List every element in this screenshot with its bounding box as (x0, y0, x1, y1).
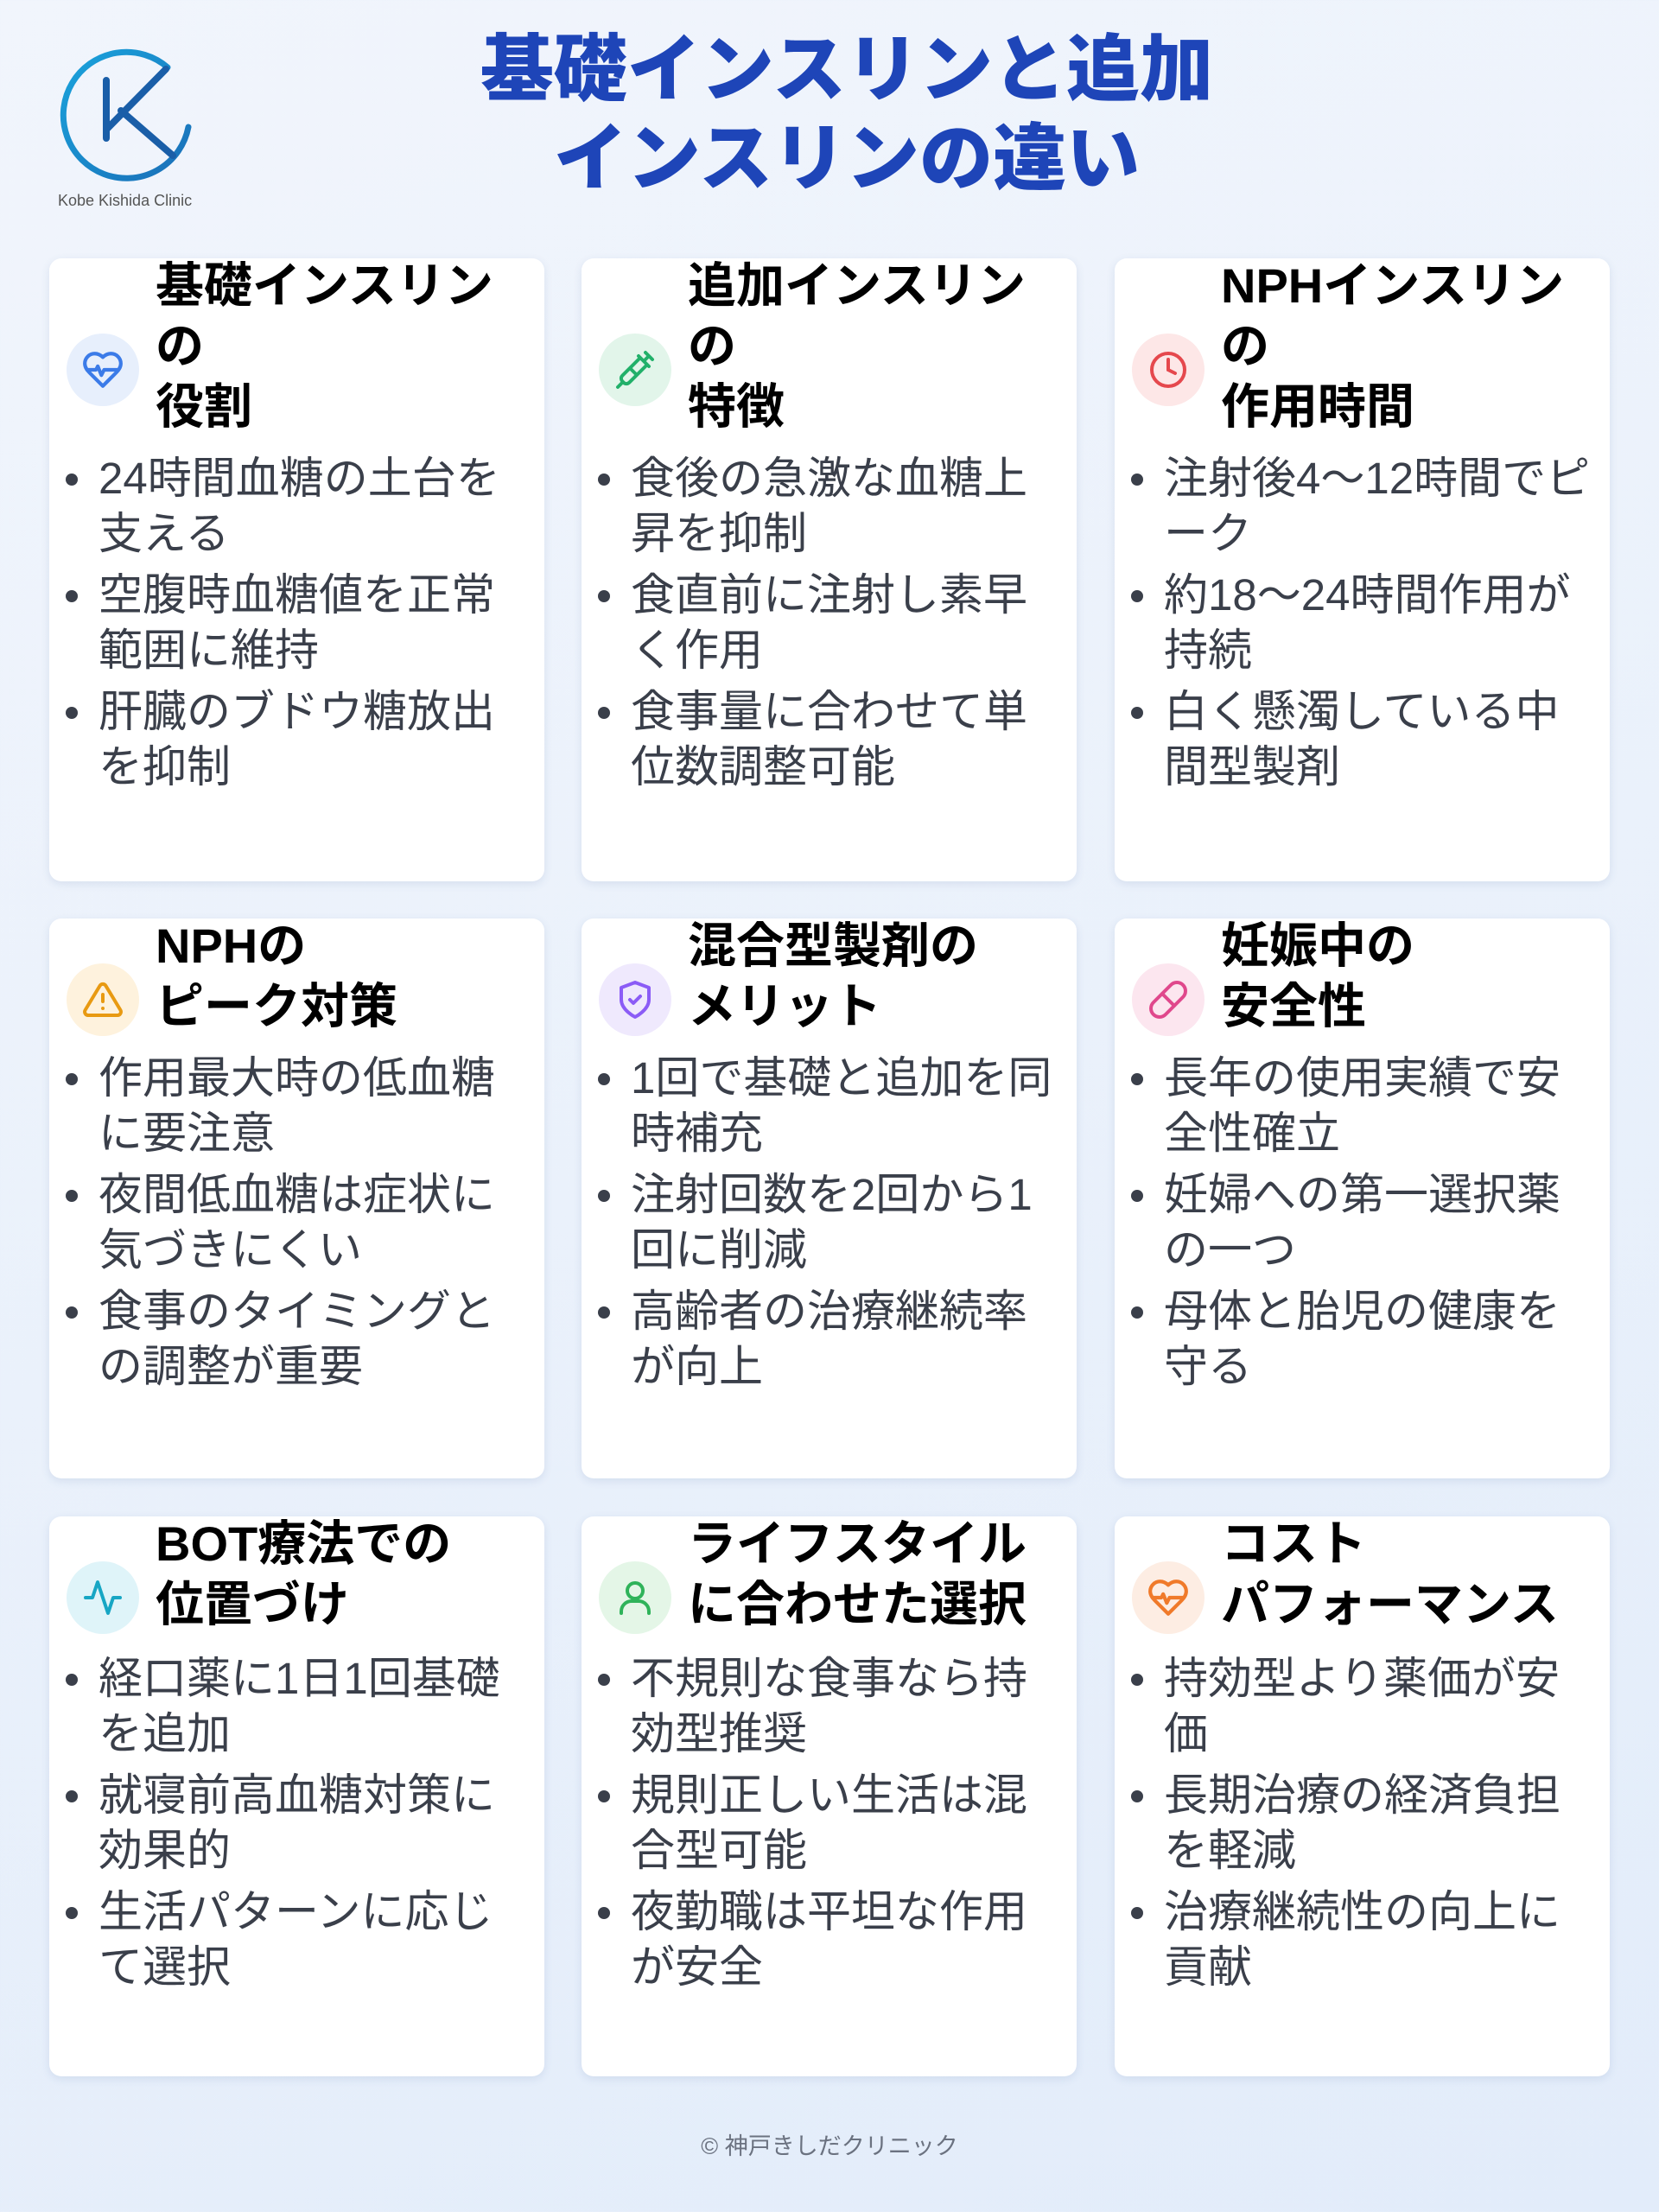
icon: activity (67, 1561, 139, 1634)
bullets (598, 1053, 1052, 1391)
icon: shield (599, 963, 671, 1036)
card: ライフスタイルに合わせた選択 (582, 1516, 1077, 2076)
bullets (1131, 1654, 1560, 1992)
card: NPHインスリンの作用時間 (1115, 258, 1610, 881)
card header (1132, 258, 1564, 434)
bullets: 夜勤職は平坦な作用 (631, 1887, 1027, 1936)
bullets: 全性確立 (1164, 1109, 1340, 1158)
bullets: 持続 (1164, 626, 1252, 675)
bullets: 価 (1164, 1709, 1208, 1758)
bullets: 合型可能 (631, 1826, 807, 1875)
bullets (66, 1053, 495, 1391)
bullets: が安全 (631, 1942, 763, 1992)
card header: コスト (1221, 1516, 1366, 1571)
bullets: 守る (1164, 1342, 1252, 1391)
bullets: 規則正しい生活は混 (631, 1770, 1027, 1820)
card header (67, 1516, 451, 1634)
bullets: て選択 (99, 1942, 231, 1992)
card: BOT療法での位置づけ (49, 1516, 544, 2076)
bullets: 注射回数を2回から1 (631, 1170, 1033, 1219)
bullets: 食事のタイミングと (99, 1287, 495, 1336)
bullets (598, 1654, 1027, 1992)
bullets: 1回で基礎と追加を同 (631, 1053, 1052, 1103)
bullets: 効果的 (99, 1826, 231, 1875)
bullets (66, 454, 500, 791)
bullets (66, 1654, 500, 1992)
card header: 特徴 (688, 379, 785, 434)
card header (1132, 1516, 1559, 1634)
bullets: 食事量に合わせて単 (631, 687, 1027, 736)
bullets: く作用 (631, 626, 763, 675)
bullets: 作用最大時の低血糖 (99, 1053, 495, 1103)
card header (599, 258, 1026, 434)
bullets: 夜間低血糖は症状に (99, 1170, 495, 1219)
bullets: 長期治療の経済負担 (1164, 1770, 1560, 1820)
bullets: 貢献 (1164, 1942, 1252, 1992)
bullets: を抑制 (99, 742, 231, 791)
card header (599, 1516, 1027, 1634)
icon: user (599, 1561, 671, 1634)
bullets: 母体と胎児の健康を (1164, 1287, 1560, 1336)
icon: warning (67, 963, 139, 1036)
card header: 妊娠中の (1221, 918, 1414, 973)
icon: clock (1132, 334, 1205, 406)
card header: 作用時間 (1221, 379, 1414, 434)
title: インスリンの違い (554, 118, 1140, 200)
bullets: 範囲に維持 (99, 626, 319, 675)
icon: syringe (599, 334, 671, 406)
card header: 役割 (156, 379, 252, 434)
icon: pill (1132, 963, 1205, 1036)
bullets (1131, 454, 1590, 791)
bullets: 食直前に注射し素早 (631, 570, 1027, 620)
bullets: 時補充 (631, 1109, 763, 1158)
card header: NPHインスリン (1221, 258, 1564, 313)
bullets: 就寝前高血糖対策に (99, 1770, 495, 1820)
card header: 基礎インスリン (156, 258, 493, 313)
bullets: 回に削減 (631, 1225, 807, 1274)
bullets: 妊婦への第一選択薬 (1164, 1170, 1560, 1219)
icon: heart (67, 334, 139, 406)
bullets: ーク (1164, 509, 1252, 558)
bullets: の一つ (1164, 1225, 1296, 1274)
bullets: 24時間血糖の土台を (99, 454, 500, 503)
card header: の (688, 319, 736, 373)
bullets: 位数調整可能 (631, 742, 895, 791)
bullets: 空腹時血糖値を正常 (99, 570, 495, 620)
bullets (598, 454, 1027, 791)
bullets: に要注意 (99, 1109, 275, 1158)
bullets: 効型推奨 (631, 1709, 807, 1758)
title (480, 29, 1213, 200)
logo (58, 48, 192, 209)
bullets: 生活パターンに応じ (99, 1887, 493, 1936)
bullets: 白く懸濁している中 (1164, 687, 1559, 736)
bullets: が向上 (631, 1342, 763, 1391)
card header: 位置づけ (156, 1577, 349, 1631)
card: 基礎インスリンの役割 (49, 258, 544, 881)
card: コストパフォーマンス (1115, 1516, 1610, 2076)
bullets (1131, 1053, 1560, 1391)
card header: メリット (688, 979, 881, 1033)
card: 追加インスリンの特徴 (582, 258, 1077, 881)
card: 妊娠中の安全性 (1115, 918, 1610, 1478)
card header (1132, 918, 1414, 1036)
card header: に合わせた選択 (688, 1577, 1027, 1631)
card header (67, 918, 397, 1036)
bullets: 間型製剤 (1164, 742, 1340, 791)
bullets: を追加 (99, 1709, 231, 1758)
bullets: を軽減 (1164, 1826, 1296, 1875)
bullets: 持効型より薬価が安 (1164, 1654, 1560, 1703)
bullets: 治療継続性の向上に (1164, 1887, 1560, 1936)
card header: の (1221, 319, 1269, 373)
bullets: 注射後4～12時間でピ (1164, 454, 1590, 503)
card header (67, 258, 493, 434)
title: 基礎インスリンと追加 (480, 29, 1213, 111)
bullets: 経口薬に1日1回基礎 (99, 1654, 500, 1703)
card header: NPHの (156, 918, 306, 973)
card header: パフォーマンス (1221, 1577, 1559, 1631)
card header: の (156, 319, 204, 373)
card: 混合型製剤のメリット (582, 918, 1077, 1478)
card: NPHのピーク対策 (49, 918, 544, 1478)
card header: ライフスタイル (688, 1516, 1027, 1571)
bullets: 支える (99, 509, 229, 558)
bullets: 長年の使用実績で安 (1164, 1053, 1560, 1103)
bullets: 高齢者の治療継続率 (631, 1287, 1027, 1336)
card header: ピーク対策 (156, 979, 397, 1033)
card header: 安全性 (1221, 979, 1366, 1033)
icon: orange heart (1132, 1561, 1205, 1634)
card header: 追加インスリン (688, 258, 1026, 313)
card header (599, 918, 978, 1036)
bullets: 昇を抑制 (631, 509, 807, 558)
card header: BOT療法での (156, 1516, 451, 1571)
footer: © 神戸きしだクリニック (701, 2133, 958, 2159)
card header: 混合型製剤の (688, 918, 978, 973)
bullets: の調整が重要 (99, 1342, 363, 1391)
logo: Kobe Kishida Clinic (58, 192, 192, 209)
bullets: 気づきにくい (99, 1225, 362, 1274)
bullets: 食後の急激な血糖上 (631, 454, 1027, 503)
bullets: 肝臓のブドウ糖放出 (99, 687, 495, 736)
bullets: 不規則な食事なら持 (631, 1654, 1027, 1703)
bullets: 約18～24時間作用が (1164, 570, 1570, 620)
